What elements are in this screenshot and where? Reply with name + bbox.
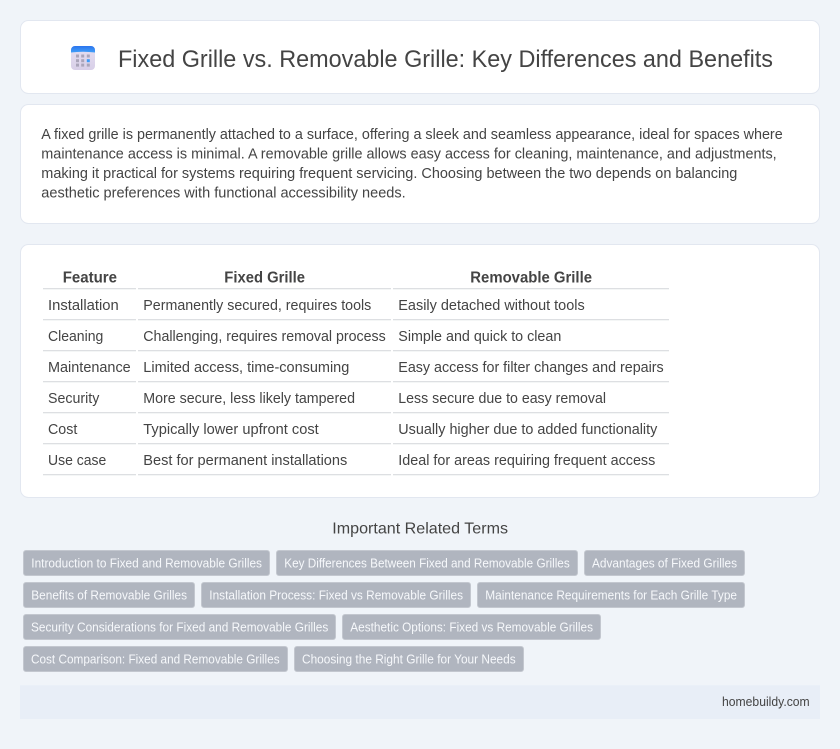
- row: maintenance: Easy access for filter changes and repairs: [398, 360, 664, 376]
- panel: summary paragraph: maintenance access is minimal. A removable grille allows easy access for cleaning, maintenance, and adjustments,: [41, 146, 777, 162]
- row: installation: Easily detached without tools: [398, 298, 585, 314]
- table header row: Fixed Grille: [224, 270, 305, 287]
- panel: related term tags: Benefits of Removable Grilles: [31, 588, 187, 602]
- footer bar: [20, 685, 820, 719]
- row: maintenance: [48, 360, 664, 376]
- icon: calendar: [71, 46, 95, 70]
- row: cleaning: Simple and quick to clean: [398, 329, 561, 345]
- row: cleaning: [48, 329, 561, 345]
- row: maintenance: Maintenance: [48, 360, 131, 376]
- panel: related term tags: Cost Comparison: Fixed and Removable Grilles: [31, 652, 280, 666]
- panel: summary paragraph: making it practical for systems requiring frequent servicing. Choosing between the two depends on balancing: [41, 166, 737, 182]
- row: security: Security: [48, 391, 100, 407]
- row: installation: Permanently secured, requires tools: [143, 298, 371, 314]
- row: security: More secure, less likely tampered: [143, 391, 355, 407]
- row: use case: Ideal for areas requiring frequent access: [398, 453, 655, 469]
- title: Fixed Grille vs. Removable Grille: Key Differences and Benefits: [118, 46, 773, 73]
- panel: related term tags: Aesthetic Options: Fixed vs Removable Grilles: [350, 620, 593, 634]
- table header row: Feature: [63, 270, 117, 287]
- panel: related term tags: Advantages of Fixed Grilles: [592, 556, 737, 570]
- panel: related term tags: Installation Process: Fixed vs Removable Grilles: [209, 588, 463, 602]
- row: use case: [48, 453, 655, 469]
- panel: summary paragraph: [20, 104, 820, 224]
- panel: summary paragraph: A fixed grille is permanently attached to a surface, offering a sleek and seamless appearance, ideal for spaces where: [41, 127, 783, 143]
- table header row: [63, 270, 592, 287]
- row: installation: Installation: [48, 298, 119, 314]
- row: security: [48, 391, 606, 407]
- row: cleaning: Cleaning: [48, 329, 103, 345]
- footer bar: homebuildy.com: [722, 694, 810, 709]
- panel: comparison table: [20, 244, 820, 498]
- panel: related term tags: Maintenance Requirements for Each Grille Type: [485, 588, 737, 602]
- table header row: Removable Grille: [470, 270, 592, 287]
- row: use case: Use case: [48, 453, 106, 469]
- row: installation: [48, 298, 585, 314]
- row: security: Less secure due to easy removal: [398, 391, 606, 407]
- row: cleaning: Challenging, requires removal process: [143, 329, 386, 345]
- panel: summary paragraph: aesthetic preferences with functional accessibility needs.: [41, 185, 406, 201]
- panel: related term tags: Key Differences Between Fixed and Removable Grilles: [284, 556, 570, 570]
- panel: related term tags: [24, 550, 744, 672]
- row: cost: [48, 422, 658, 438]
- row: use case: Best for permanent installations: [143, 453, 347, 469]
- panel: related term tags: Security Considerations for Fixed and Removable Grilles: [31, 620, 328, 634]
- panel: title header: [20, 20, 820, 94]
- panel: related term tags: Introduction to Fixed and Removable Grilles: [31, 556, 262, 570]
- row: cost: Cost: [48, 422, 77, 438]
- panel: related term tags: Choosing the Right Grille for Your Needs: [302, 652, 516, 666]
- row: maintenance: Limited access, time-consuming: [143, 360, 349, 376]
- row: cost: Typically lower upfront cost: [143, 422, 319, 438]
- row: cost: Usually higher due to added functionality: [398, 422, 658, 438]
- heading: important related terms: Important Related Terms: [332, 520, 508, 537]
